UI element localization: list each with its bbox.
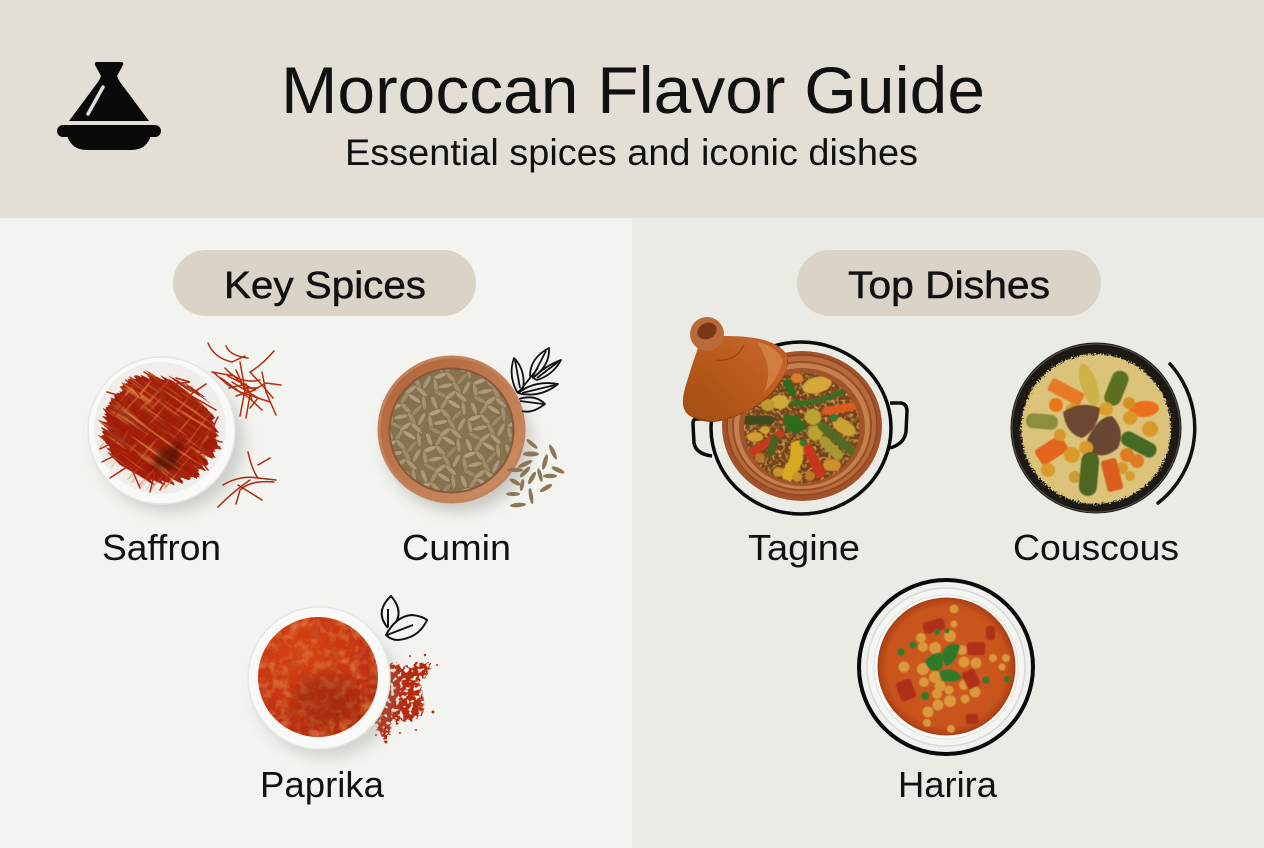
- spice: paprika spill: [372, 654, 438, 744]
- background: right panel: [632, 218, 1264, 848]
- label: Couscous: Couscous: [1013, 527, 1179, 568]
- icon: cumin leaf sprig: [512, 348, 561, 412]
- heading pill: Top Dishes: [797, 250, 1101, 316]
- label: Saffron: Saffron: [102, 527, 221, 568]
- heading pill: Top Dishes: Top Dishes: [848, 265, 1050, 307]
- label: Harira: Harira: [898, 764, 998, 805]
- couscous outline arc: [1158, 364, 1195, 503]
- dish: harira: [859, 580, 1033, 754]
- label: Cumin: Cumin: [402, 527, 511, 568]
- spice: saffron bowl: [84, 352, 244, 512]
- spice: cumin bowl: [378, 356, 532, 512]
- spice: paprika bowl: [248, 607, 399, 758]
- tagine clay base: [722, 351, 882, 501]
- subtitle: Essential spices and iconic dishes: [345, 132, 918, 173]
- harira soup: [878, 598, 1016, 736]
- harira outline ring: [859, 580, 1033, 754]
- spice: loose saffron threads bottom: [218, 452, 276, 507]
- heading pill: Key Spices: Key Spices: [224, 265, 426, 307]
- spice: loose cumin seeds: [506, 438, 565, 508]
- label: Paprika: Paprika: [260, 764, 385, 805]
- tagine outline ring and handles: [693, 342, 907, 514]
- harira chickpeas and garnish: [895, 604, 1010, 733]
- tagine vegetables: [744, 373, 860, 483]
- couscous vegetables and meat: [1025, 362, 1160, 497]
- harira bowl: [867, 588, 1025, 746]
- background: left panel: [0, 218, 632, 848]
- title: Moroccan Flavor Guide: [281, 53, 985, 127]
- dish: couscous: [1010, 342, 1195, 514]
- icon: paprika leaves: [382, 596, 427, 640]
- couscous plate: [1010, 342, 1182, 514]
- icon: tagine: [57, 62, 161, 150]
- spice: loose saffron threads top: [208, 343, 281, 418]
- heading pill: Key Spices: [173, 250, 476, 316]
- tagine lid: [683, 317, 788, 422]
- couscous grain: [1021, 354, 1171, 504]
- label: Tagine: Tagine: [748, 527, 860, 568]
- header band: [0, 0, 1264, 218]
- dish: tagine: [683, 317, 907, 514]
